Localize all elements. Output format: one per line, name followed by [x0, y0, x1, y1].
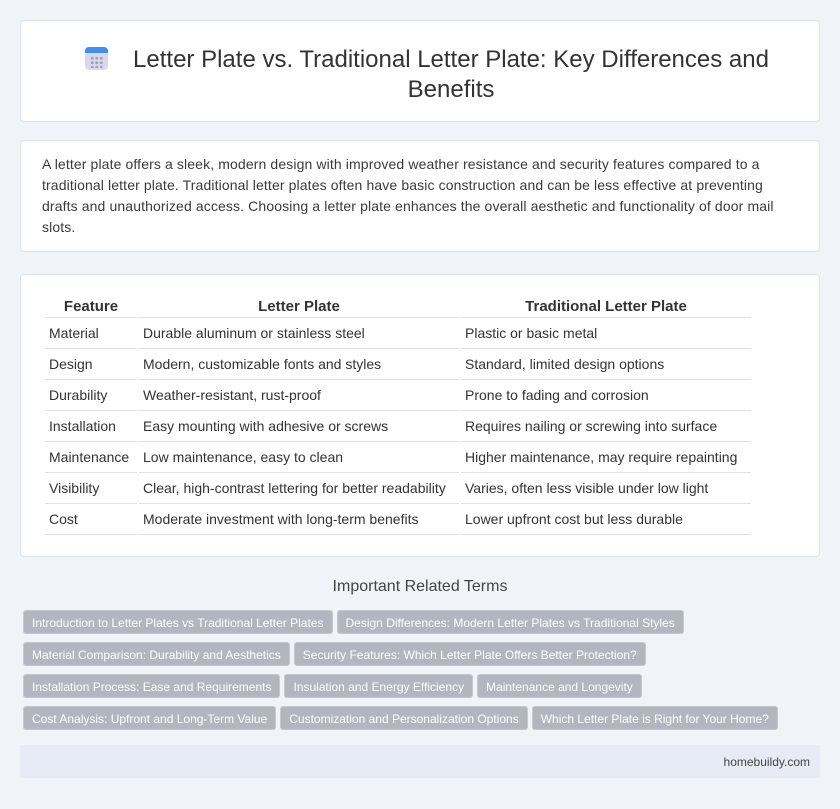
- comparison table: Plastic or basic metal: [465, 325, 597, 341]
- comparison table: Higher maintenance, may require repainting: [465, 449, 737, 465]
- comparison table: Material: [49, 325, 99, 341]
- related terms heading: Important Related Terms: [333, 578, 507, 595]
- intro text: A letter plate offers a sleek, modern design with improved weather resistance and security features compared to a traditional letter plate. Traditional letter plates often have basic construction and can be less effective at preventing drafts and unauthorized access. Choosing a letter plate enhances the overall aesthetic and functionality of door mail slots.: [42, 156, 774, 235]
- footer: homebuildy.com: [724, 755, 810, 769]
- comparison table: Prone to fading and corrosion: [465, 387, 649, 403]
- comparison table: Design: [49, 356, 93, 372]
- icon: calendar: [85, 47, 108, 70]
- related term tags: Design Differences: Modern Letter Plates vs Traditional Styles: [346, 616, 675, 630]
- comparison table: Durability: [49, 387, 107, 403]
- title: Letter Plate vs. Traditional Letter Plate: Key Differences and Benefits: [133, 46, 769, 103]
- comparison table: Low maintenance, easy to clean: [143, 449, 343, 465]
- related term tags: Material Comparison: Durability and Aesthetics: [32, 648, 281, 662]
- comparison table: Weather-resistant, rust-proof: [143, 387, 321, 403]
- comparison table: Lower upfront cost but less durable: [465, 511, 683, 527]
- related term tags: Which Letter Plate is Right for Your Home?: [541, 712, 769, 726]
- comparison table: Durable aluminum or stainless steel: [143, 325, 365, 341]
- intro text: [20, 140, 820, 252]
- related term tags: Installation Process: Ease and Requirements: [32, 680, 271, 694]
- comparison table: Traditional Letter Plate: [525, 298, 687, 315]
- comparison table: Modern, customizable fonts and styles: [143, 356, 381, 372]
- comparison table: Maintenance: [49, 449, 129, 465]
- title card: [20, 20, 820, 122]
- comparison table: Feature: [64, 298, 118, 315]
- related term tags: Security Features: Which Letter Plate Offers Better Protection?: [303, 648, 637, 662]
- comparison table: Standard, limited design options: [465, 356, 664, 372]
- related term tags: Insulation and Energy Efficiency: [293, 680, 464, 694]
- related term tags: Introduction to Letter Plates vs Traditional Letter Plates: [32, 616, 324, 630]
- comparison table: Installation: [49, 418, 116, 434]
- related term tags: Maintenance and Longevity: [486, 680, 633, 694]
- comparison table: [20, 274, 820, 557]
- comparison table: Moderate investment with long-term benefits: [143, 511, 418, 527]
- footer: [20, 745, 820, 778]
- related term tags: Customization and Personalization Options: [289, 712, 519, 726]
- comparison table: Requires nailing or screwing into surface: [465, 418, 717, 434]
- comparison table: Cost: [49, 511, 78, 527]
- comparison table: Letter Plate: [258, 298, 340, 315]
- related term tags: Cost Analysis: Upfront and Long-Term Value: [32, 712, 267, 726]
- comparison table: Easy mounting with adhesive or screws: [143, 418, 388, 434]
- comparison table: Clear, high-contrast lettering for better readability: [143, 480, 446, 496]
- comparison table: Visibility: [49, 480, 99, 496]
- related term tags: [23, 610, 778, 730]
- comparison table: Varies, often less visible under low light: [465, 480, 708, 496]
